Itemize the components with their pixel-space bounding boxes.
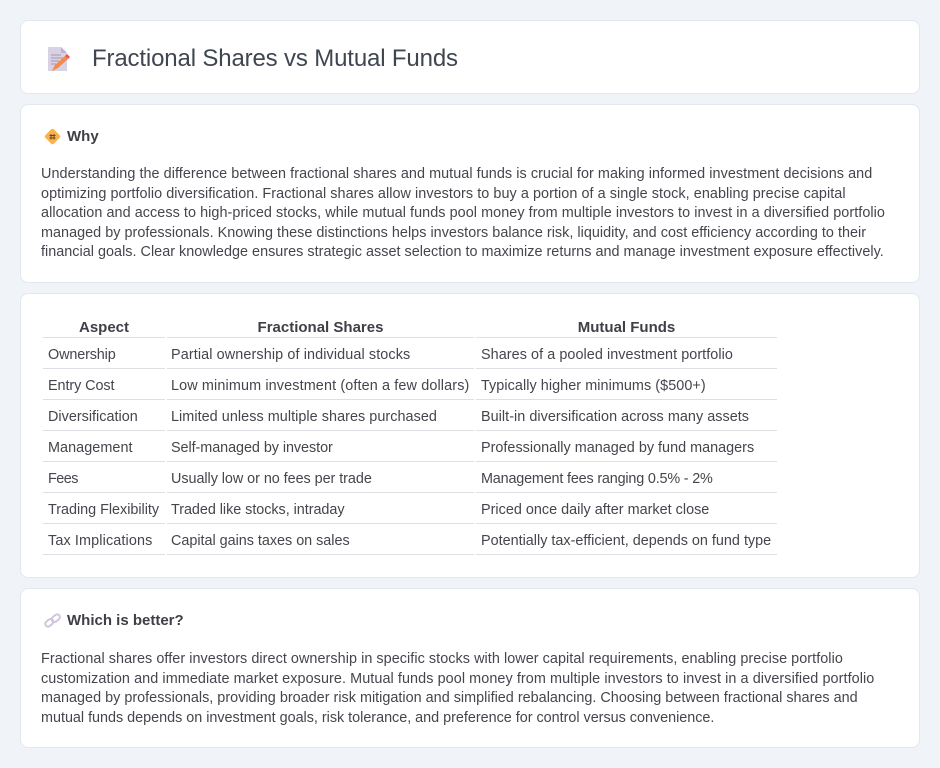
row: ownership	[48, 347, 733, 363]
panel: title header	[20, 20, 920, 94]
row: management: Professionally managed by fund managers	[481, 440, 754, 456]
row: entry cost: Low minimum investment (often a few dollars)	[171, 378, 469, 394]
row: tax implications: Capital gains taxes on sales	[171, 533, 350, 549]
row: fees: Fees	[48, 471, 78, 487]
row: entry cost: Entry Cost	[48, 378, 114, 394]
why text block: managed by professionals. Knowing these distinctions helps investors balance risk, liquidity, and cost efficiency according to their	[41, 225, 866, 241]
row: trading flexibility: Trading Flexibility	[48, 502, 159, 518]
table header: Fractional Shares	[258, 319, 383, 336]
row: tax implications: Potentially tax-efficient, depends on fund type	[481, 533, 771, 549]
icon: diamond sign	[44, 128, 60, 144]
row: ownership: Shares of a pooled investment portfolio	[481, 347, 733, 363]
row: management	[48, 440, 754, 456]
row: ownership: Ownership	[48, 347, 116, 363]
panel: comparison table	[20, 293, 920, 578]
which is better text block	[41, 651, 874, 726]
why text block: financial goals. Clear knowledge ensures strategic asset selection to maximize returns and manage investment exposure effectively.	[41, 244, 884, 260]
row: management: Management	[48, 440, 133, 456]
row: trading flexibility	[48, 502, 709, 518]
row: tax implications: Tax Implications	[48, 533, 152, 549]
which is better text block: managed by professionals, providing broader risk mitigation and simplified rebalancing. Choosing between fractional shares and	[41, 690, 858, 706]
row: ownership: Partial ownership of individual stocks	[171, 347, 410, 363]
row: fees	[48, 471, 713, 487]
row: tax implications	[48, 533, 771, 549]
row: trading flexibility: Priced once daily after market close	[481, 502, 709, 518]
row: fees: Management fees ranging 0.5% - 2%	[481, 471, 713, 487]
panel: why	[20, 104, 920, 283]
row: diversification	[48, 409, 749, 425]
which is better text block: Fractional shares offer investors direct ownership in specific stocks with lower capital requirements, enabling precise portfolio	[41, 651, 843, 667]
row: diversification: Limited unless multiple shares purchased	[171, 409, 437, 425]
which is better text block: customization and immediate market exposure. Mutual funds pool money from multiple investors to invest in a diversified portfolio	[41, 671, 874, 687]
why text block	[41, 166, 885, 260]
why text block: allocation and access to high-priced stocks, while mutual funds pool money from multiple investors to invest in a diversified portfolio	[41, 205, 885, 221]
heading: why: Why	[67, 128, 99, 145]
why text block: optimizing portfolio diversification. Fractional shares allow investors to buy a portion of a single stock, enabling precise capital	[41, 186, 846, 202]
icon: chain link	[44, 613, 61, 628]
row: trading flexibility: Traded like stocks, intraday	[171, 502, 345, 518]
heading: which is better: Which is better?	[67, 612, 184, 629]
icon: document with pencil	[48, 47, 70, 71]
title: Fractional Shares vs Mutual Funds	[92, 45, 458, 72]
table header	[79, 319, 675, 336]
table header: Mutual Funds	[578, 319, 675, 336]
row: diversification: Built-in diversification across many assets	[481, 409, 749, 425]
row: entry cost: Typically higher minimums ($500+)	[481, 378, 706, 394]
row: management: Self-managed by investor	[171, 440, 333, 456]
why text block: Understanding the difference between fractional shares and mutual funds is crucial for making informed investment decisions and	[41, 166, 872, 182]
row: fees: Usually low or no fees per trade	[171, 471, 372, 487]
row: diversification: Diversification	[48, 409, 138, 425]
row: entry cost	[48, 378, 706, 394]
which is better text block: mutual funds depends on investment goals, risk tolerance, and preference for control versus convenience.	[41, 710, 714, 726]
table header: Aspect	[79, 319, 129, 336]
panel: which is better	[20, 588, 920, 748]
